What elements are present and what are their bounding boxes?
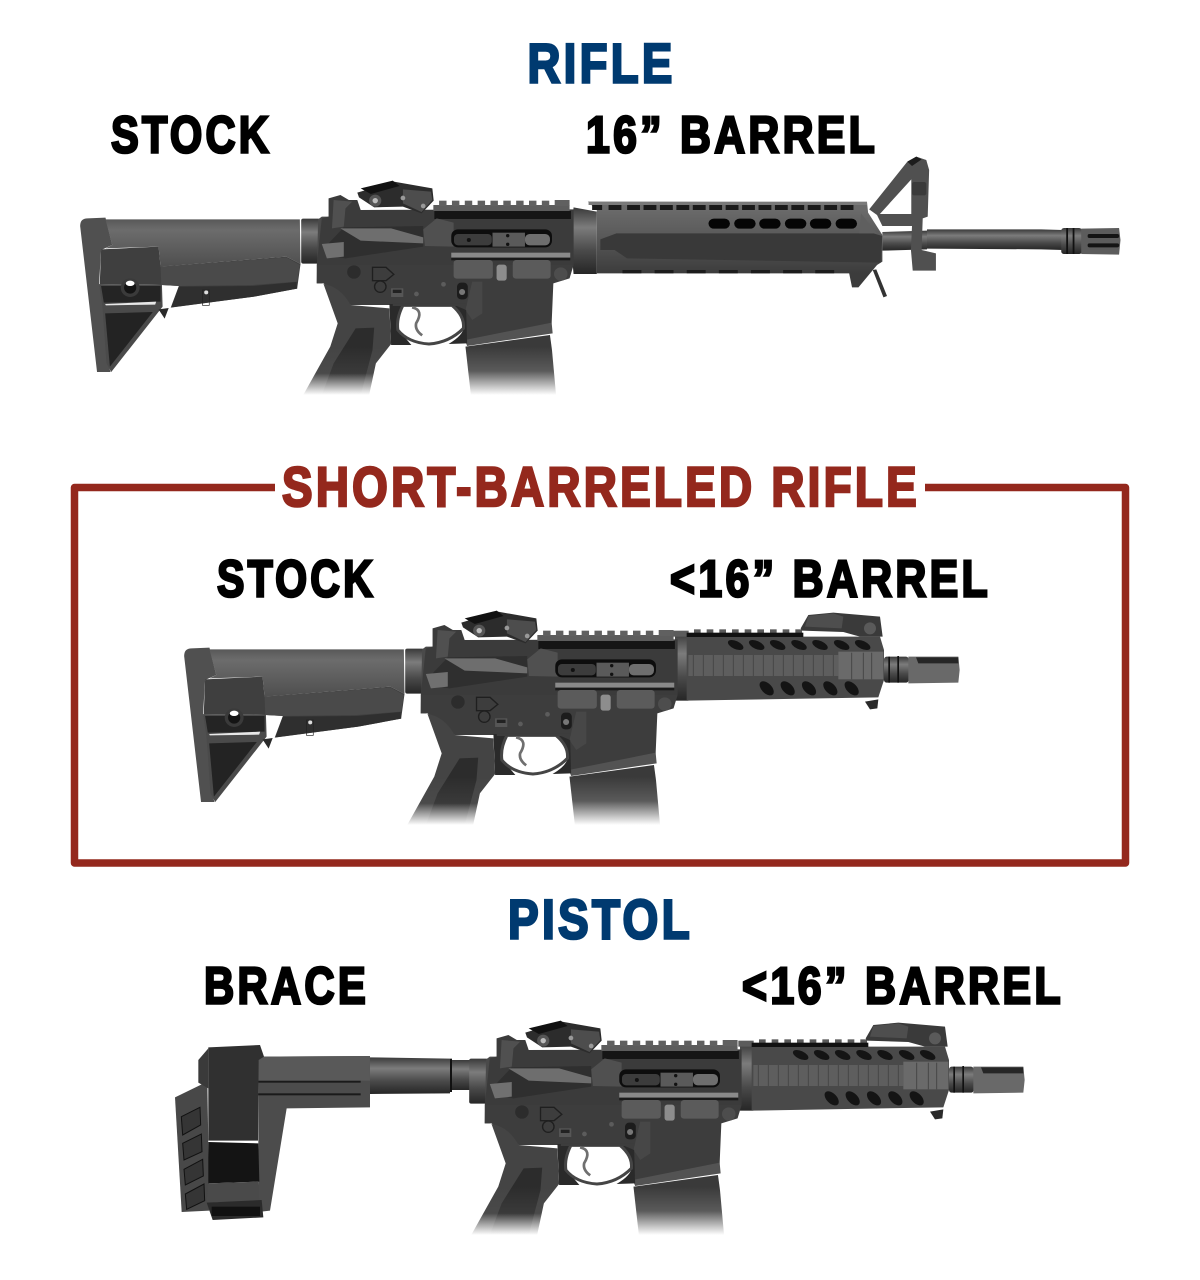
rifle stock — [80, 218, 301, 372]
pistol receiver, grip and magazine — [469, 1021, 742, 1235]
title: rifle: RIFLE — [528, 32, 676, 95]
rifle long handguard, front sight and barrel — [572, 157, 1120, 297]
title: short-barreled rifle: SHORT-BARRELED RIFLE — [282, 455, 920, 518]
pistol handguard and muzzle — [738, 1023, 1025, 1119]
short-barreled rifle stock — [184, 648, 405, 802]
pistol brace and buffer tube — [175, 1045, 470, 1220]
label: stock (short-barreled rifle): STOCK — [217, 551, 376, 609]
label: under 16 inch barrel (short-barreled rifle): <16” BARREL — [670, 551, 991, 609]
short-barreled rifle handguard and muzzle — [673, 613, 960, 709]
firearm: short-barreled rifle — [184, 611, 960, 825]
firearm: rifle — [80, 157, 1120, 395]
firearm: pistol — [175, 1021, 1025, 1235]
short-barreled rifle receiver, grip and magazine — [405, 611, 678, 825]
rifle receiver, grip and magazine — [301, 181, 574, 395]
panel: short-barreled rifle frame — [74, 488, 1126, 863]
label: 16 inch barrel: 16” BARREL — [586, 107, 878, 165]
label: brace: BRACE — [204, 958, 369, 1016]
title: pistol: PISTOL — [508, 888, 693, 951]
label: stock (rifle): STOCK — [111, 107, 272, 165]
label: under 16 inch barrel (pistol): <16” BARREL — [742, 958, 1064, 1016]
